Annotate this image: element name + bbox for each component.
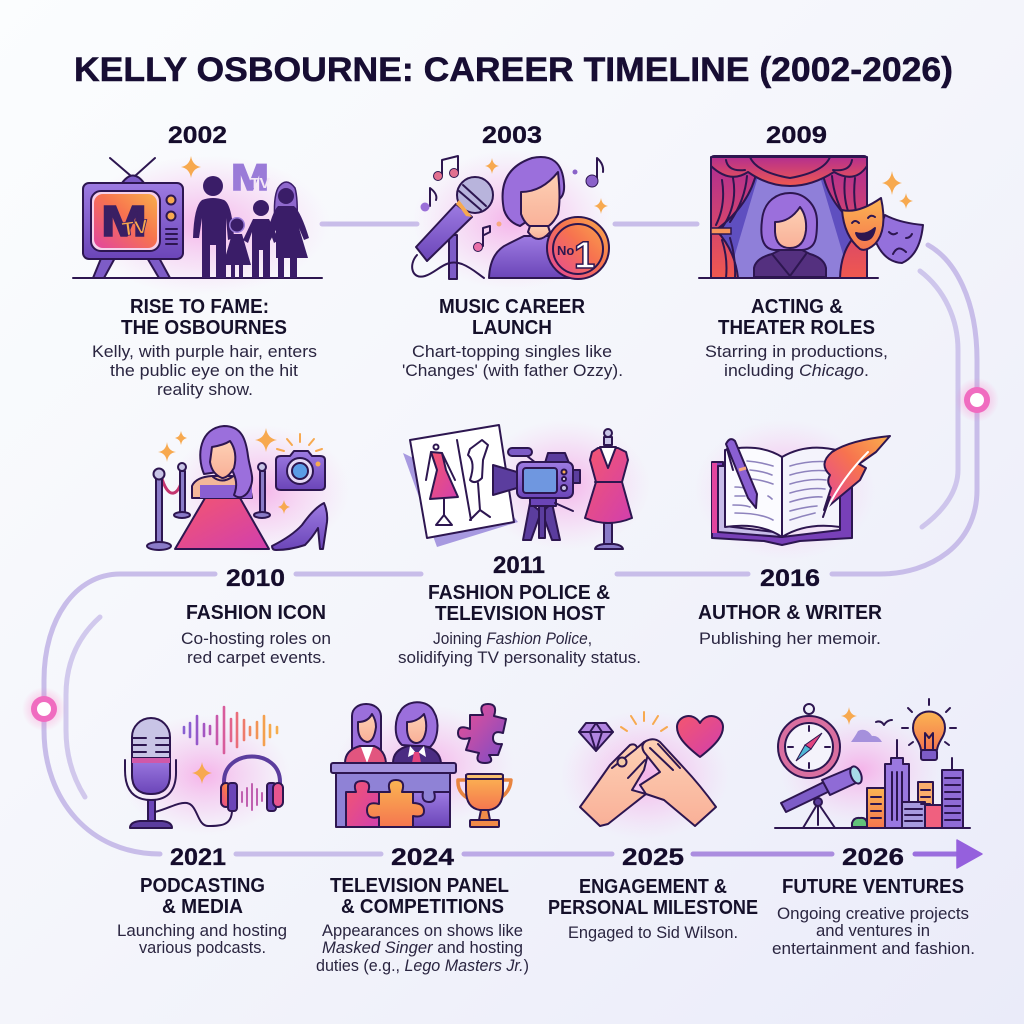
icon: microphone on stand: [412, 177, 493, 279]
year 2024: 2024: [391, 844, 455, 871]
icon: MTV logo small: M: [231, 157, 269, 198]
year 2010: 2010: [226, 565, 285, 592]
description: and ventures in: [816, 922, 930, 940]
heading: TELEVISION PANEL: [330, 875, 509, 897]
icon glow 2003: [412, 150, 612, 290]
icon: woman with purple hair: [192, 426, 252, 498]
icon: red carpet: [175, 498, 269, 549]
icon glow 2011: [480, 420, 650, 550]
heading: [439, 296, 586, 339]
icon: theater stage with curtains: [699, 156, 878, 278]
panel: 2021 podcasting: [117, 707, 290, 957]
description: the public eye on the hit: [110, 362, 298, 380]
icon: television with MTV logo: M: [101, 197, 147, 246]
description: various podcasts.: [139, 939, 266, 957]
heading: PODCASTING: [140, 875, 265, 897]
description: [117, 922, 287, 957]
panel: 2025 engagement: [548, 710, 758, 942]
description: 'Changes' (with father Ozzy).: [402, 362, 623, 380]
icon: television with MTV logo: [73, 158, 322, 278]
icon: feather quill: [823, 436, 890, 517]
icon: compass: [778, 704, 840, 778]
icon glow 2025: [560, 710, 730, 840]
description: [772, 905, 975, 958]
description: [402, 343, 623, 380]
panel: 2009 acting: [699, 122, 923, 380]
icon: open book: [712, 448, 852, 545]
description: Ongoing creative projects: [777, 905, 969, 923]
description: Co-hosting roles on: [181, 630, 331, 648]
panel: 2010 fashion icon: [147, 425, 350, 667]
description: Launching and hosting: [117, 922, 287, 940]
heading: MUSIC CAREER: [439, 296, 586, 318]
icon: cloud, bird, sparkle: [841, 707, 892, 742]
timeline path: [44, 224, 977, 854]
milestone node right: [955, 378, 999, 422]
icon: number one medal: [547, 217, 609, 279]
heading: LAUNCH: [472, 317, 552, 339]
description: Kelly, with purple hair, enters: [92, 343, 317, 361]
icon: television with MTV logo: TV: [121, 216, 150, 241]
heading: PERSONAL MILESTONE: [548, 897, 758, 919]
heading: RISE TO FAME:: [130, 296, 269, 318]
icon: high heel shoe: [272, 503, 327, 550]
icon: sound waveform: [184, 707, 277, 753]
icon: headphones: [221, 756, 283, 811]
year 2003: 2003: [482, 122, 542, 149]
icon: studio microphone: [125, 718, 232, 828]
year 2021: 2021: [170, 844, 226, 871]
icon: number one medal: No: [557, 243, 574, 258]
icon: number one medal: 1: [574, 235, 595, 277]
icon glow 2021: [120, 715, 290, 835]
heading: [548, 876, 758, 919]
icon glow 2026: [780, 715, 940, 825]
panel: 2002 rise to fame: [73, 122, 330, 399]
heading: ENGAGEMENT &: [579, 876, 727, 898]
heading: AUTHOR & WRITER: [698, 602, 883, 624]
title: KELLY OSBOURNE: CAREER TIMELINE (2002-2026): [74, 51, 953, 89]
description: Chart-topping singles like: [412, 343, 612, 361]
icon: dress on mannequin: [585, 429, 632, 549]
heading: [121, 296, 287, 339]
timeline arrow: [915, 840, 982, 868]
icon: light bulb: [902, 699, 956, 760]
icon: music notes and sparkles: [420, 156, 608, 252]
icon: desk with puzzle front: [331, 763, 456, 827]
icon: family silhouettes: [193, 176, 309, 278]
icon: MTV logo small: TV: [250, 175, 270, 192]
heading: FASHION POLICE &: [428, 582, 610, 604]
panel: 2016 author: [695, 420, 890, 648]
icon: comedy and tragedy masks: [842, 171, 923, 263]
description: Engaged to Sid Wilson.: [568, 924, 738, 942]
icon: sketch sheet with dress drawings: [403, 425, 518, 547]
description: [705, 343, 888, 380]
icon: diamond: [579, 723, 613, 751]
description: red carpet events.: [187, 649, 326, 667]
icon: sparkles: [158, 428, 290, 514]
description: [316, 922, 529, 975]
year 2002: 2002: [168, 122, 227, 149]
year 2026: 2026: [842, 844, 904, 871]
icon: clasped hands with ring: [580, 739, 716, 826]
icon glow 2024: [335, 705, 515, 825]
icon: heart: [677, 716, 723, 757]
heading: THEATER ROLES: [718, 317, 875, 339]
icon: person with purple hair: [489, 157, 580, 278]
milestone node left: [22, 687, 66, 731]
icon glow 2010: [170, 425, 350, 555]
description: reality show.: [157, 381, 253, 399]
icon: panelists: [345, 702, 441, 763]
heading: ACTING &: [751, 296, 843, 318]
description: solidifying TV personality status.: [398, 649, 641, 667]
panel: 2024 television panel: [316, 702, 529, 975]
icon: sparkle: [192, 762, 212, 784]
icon: camera: [276, 434, 325, 490]
heading: & COMPETITIONS: [341, 896, 504, 918]
description: Starring in productions,: [705, 343, 888, 361]
icon: trophy: [458, 774, 511, 827]
icon glow 2016: [695, 420, 875, 560]
heading: [718, 296, 875, 339]
heading: FUTURE VENTURES: [782, 876, 964, 898]
description: Publishing her memoir.: [699, 630, 881, 648]
icon: velvet rope posts: [147, 463, 270, 550]
description: [398, 630, 641, 667]
description: including Chicago .: [724, 362, 869, 380]
description: Joining Fashion Police,: [433, 630, 592, 648]
panel: 2026 future ventures: [772, 699, 975, 958]
icon: video camera on tripod: [493, 448, 580, 540]
description: Appearances on shows like: [322, 922, 523, 940]
icon: telescope: [781, 765, 867, 828]
icon: puzzle piece: [458, 704, 506, 763]
year 2025: 2025: [622, 844, 684, 871]
description: entertainment and fashion.: [772, 940, 975, 958]
heading: [140, 875, 265, 918]
description: Masked Singer and hosting: [322, 939, 523, 957]
icon: pen: [726, 439, 757, 508]
icon: city skyline: [775, 740, 970, 828]
heading: & MEDIA: [162, 896, 243, 918]
description: duties (e.g., Lego Masters Jr.): [316, 957, 529, 975]
icon: sparkle: [181, 156, 201, 178]
panel: 2011 fashion police: [398, 420, 650, 667]
year 2009: 2009: [766, 122, 827, 149]
heading: [428, 582, 610, 625]
icon: rays: [621, 712, 667, 731]
year 2016: 2016: [760, 565, 820, 592]
icon glow 2002: [80, 155, 330, 295]
heading: FASHION ICON: [186, 602, 326, 624]
person on stage: [754, 247, 826, 277]
heading: THE OSBOURNES: [121, 317, 287, 339]
panel: 2003 music career: [402, 122, 623, 380]
heading: [330, 875, 509, 918]
heading: TELEVISION HOST: [435, 603, 605, 625]
description: [92, 343, 317, 399]
year 2011: 2011: [493, 552, 545, 579]
description: [181, 630, 331, 667]
